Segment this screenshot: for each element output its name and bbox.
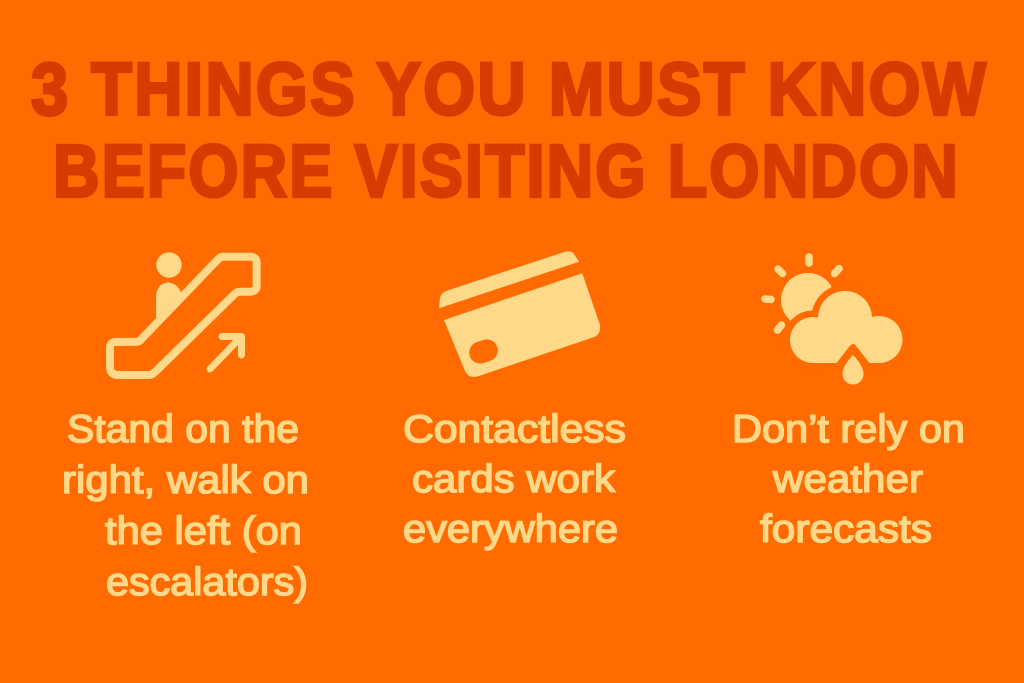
text: escalator tip: right, walk on — [62, 459, 309, 502]
text: contactless tip: cards work — [412, 458, 616, 501]
title — [31, 48, 988, 212]
icon: sun, cloud and rain — [765, 257, 902, 384]
text: weather tip: weather — [772, 458, 923, 501]
icon: contactless card — [439, 251, 600, 377]
text: escalator tip: the left (on — [105, 510, 302, 553]
icon: escalator — [110, 252, 257, 375]
text: weather tip: forecasts — [760, 508, 932, 551]
text: contactless tip: everywhere — [403, 508, 618, 551]
text: escalator tip — [62, 408, 309, 604]
text: contactless tip: Contactless — [403, 408, 626, 451]
text: escalator tip: Stand on the — [67, 408, 299, 451]
text: weather tip: Don’t rely on — [732, 408, 965, 451]
text: contactless tip — [403, 408, 626, 551]
text: escalator tip: escalators) — [106, 561, 308, 604]
text: weather tip — [732, 408, 965, 551]
